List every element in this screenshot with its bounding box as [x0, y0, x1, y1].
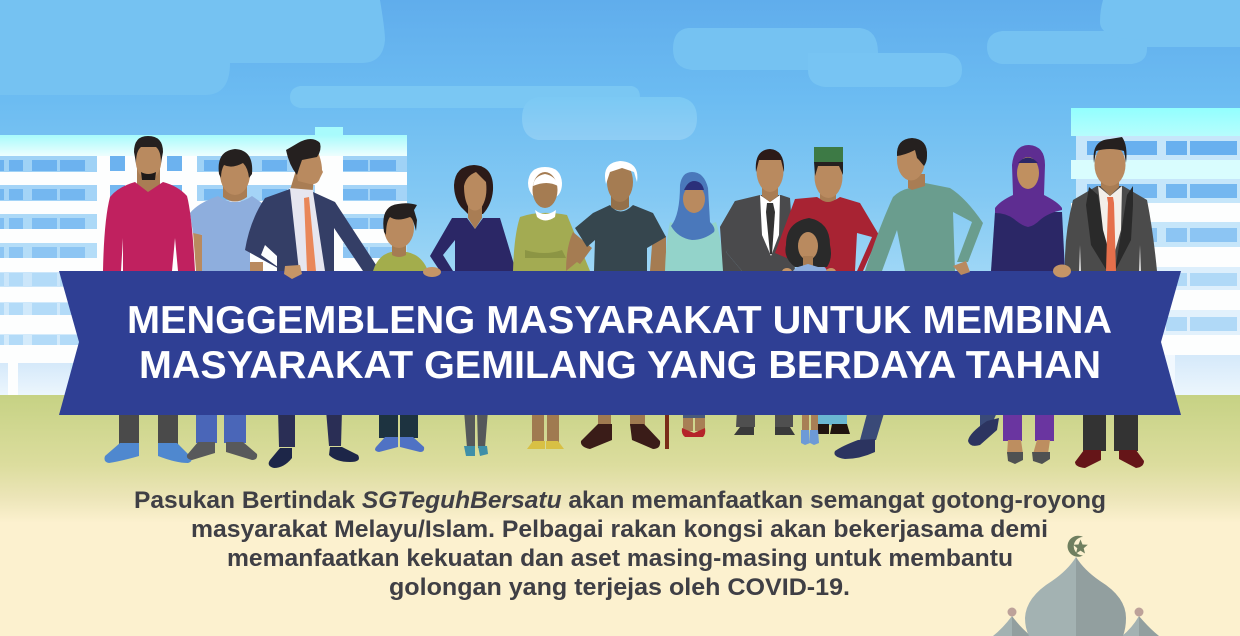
icon: crescent and star: [1068, 536, 1088, 557]
legs: man in navy suit: [269, 410, 359, 468]
legs: man in blue tee: [187, 410, 257, 460]
person: man in green sweater: [865, 138, 983, 271]
person: man in navy suit: [245, 139, 380, 272]
person: man in dark suit: [1065, 137, 1157, 271]
person: small girl: [782, 218, 836, 276]
person: elderly woman: [513, 167, 590, 271]
person: man in grey suit: [720, 149, 795, 271]
person: man in blue tee: [190, 149, 263, 271]
person: woman in purple hijab: [991, 145, 1065, 271]
hand: woman on banner: [423, 267, 441, 277]
legs: man in grey suit: [734, 410, 795, 435]
legs: small girl: [801, 410, 819, 445]
legs: elderly woman: [527, 410, 564, 449]
hand: man in navy suit on banner: [284, 265, 302, 279]
ground: [0, 395, 1240, 523]
legs: man in red shirt: [816, 410, 850, 434]
person: man in red sweater: [103, 136, 195, 271]
body text: golongan yang terjejas oleh COVID-19.: [389, 574, 850, 601]
legs: boy: [375, 410, 424, 452]
legs: man in dark suit: [1075, 410, 1144, 468]
building: right: [1071, 108, 1240, 395]
legs: elderly man with cane: [581, 410, 669, 449]
sky background: [0, 0, 1240, 400]
body text: [134, 487, 1106, 601]
legs: hijab girl: [682, 410, 705, 437]
title: [127, 299, 1112, 387]
body text: Pasukan Bertindak SGTeguhBersatu akan memanfaatkan semangat gotong-royong: [134, 487, 1106, 514]
clouds: [0, 0, 1240, 140]
person: boy: [373, 203, 428, 271]
title: MASYARAKAT GEMILANG YANG BERDAYA TAHAN: [139, 344, 1101, 387]
legs: man in red sweater: [104, 410, 192, 463]
title: MENGGEMBLENG MASYARAKAT UNTUK MEMBINA: [127, 299, 1112, 342]
legs: woman in purple hijab: [1003, 410, 1054, 464]
hand: man in green sweater on banner: [953, 261, 970, 275]
body text: masyarakat Melayu/Islam. Pelbagai rakan kongsi akan bekerjasama demi: [191, 516, 1048, 543]
hand: man in dark suit: [1053, 264, 1071, 278]
body text: memanfaatkan kekuatan dan aset masing-masing untuk membantu: [227, 545, 1013, 572]
person: man in red shirt with songkok: [775, 147, 879, 271]
people upper bodies: [103, 136, 1157, 276]
person: hijab girl: [665, 172, 723, 271]
person: woman in navy dress: [430, 165, 516, 271]
legs: woman in navy dress: [464, 410, 488, 456]
building: left: [0, 127, 407, 395]
people legs: [104, 410, 1144, 468]
legs: man in green sweater: [834, 410, 999, 459]
banner: [59, 271, 1181, 415]
cream foreground: [0, 523, 1240, 636]
person: elderly man: [566, 161, 666, 271]
mosque: [993, 536, 1159, 636]
